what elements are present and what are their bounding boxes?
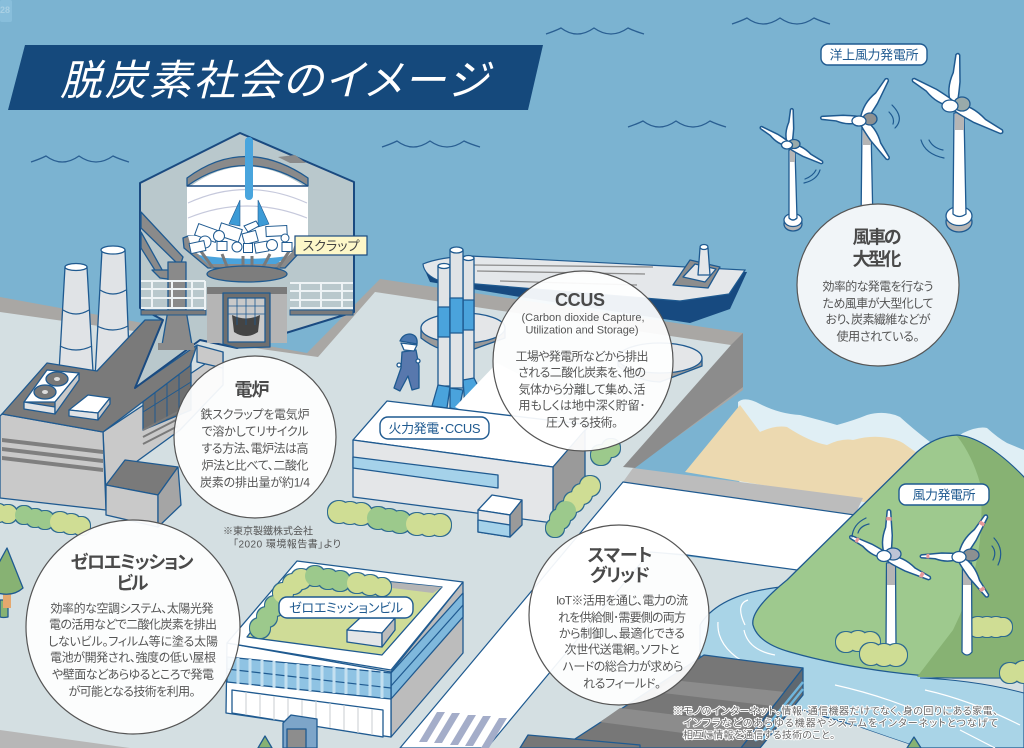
label: onshore wind bbox=[899, 484, 989, 505]
footnote: Tokyo Steel source: 「2020 環境報告書」より bbox=[233, 538, 341, 550]
footnote: IoT definition: インフラなどのあらゆる機器やシステムをインターネットとつなげて bbox=[683, 716, 998, 730]
dark solar buildings bbox=[520, 655, 803, 748]
page number bbox=[0, 0, 12, 22]
scrap pile bbox=[189, 221, 292, 254]
land bbox=[0, 292, 731, 748]
road strip bbox=[623, 468, 863, 515]
arcs bbox=[229, 200, 269, 227]
callout: electric furnace: 鉄スクラップを電気炉 bbox=[200, 406, 310, 422]
label: offshore wind bbox=[821, 44, 927, 65]
callout: CCUS: Utilization and Storage) bbox=[526, 324, 638, 336]
right railing bbox=[290, 283, 353, 315]
callout: smart grid: ハードの総合力が求めら bbox=[562, 658, 684, 674]
callout: electric furnace: 炉法と比べて、二酸化 bbox=[202, 458, 308, 472]
roof hedge bbox=[250, 566, 391, 638]
label: zero emission building: ゼロエミッションビル bbox=[289, 600, 403, 616]
label: scrap: スクラップ bbox=[302, 238, 360, 254]
furnace dome bbox=[187, 155, 308, 242]
callout: electric furnace: 炭素の排出量が約1/4 bbox=[200, 474, 310, 490]
label: onshore wind: 風力発電所 bbox=[912, 488, 976, 502]
callout: electric furnace: 電炉 bbox=[234, 380, 270, 400]
beach bbox=[685, 405, 917, 503]
label: thermal CCUS bbox=[380, 417, 489, 439]
callout: larger wind turbines: おり、炭素繊維などが bbox=[826, 312, 931, 326]
callout: CCUS: CCUS bbox=[555, 290, 605, 310]
callout: smart grid bbox=[529, 525, 709, 705]
label: thermal CCUS: 火力発電･CCUS bbox=[388, 421, 481, 436]
crane bbox=[141, 212, 194, 350]
label: zero emission building bbox=[279, 597, 413, 618]
furnace bowl bbox=[183, 236, 300, 282]
footnote: IoT definition bbox=[673, 704, 998, 742]
label: offshore wind: 洋上風力発電所 bbox=[830, 48, 918, 62]
sea waves bbox=[31, 18, 830, 162]
icon: offshore wind turbine medium bbox=[820, 76, 899, 225]
callout: smart grid: れるフィールド。 bbox=[583, 676, 661, 690]
callout: larger wind turbines: 使用されている。 bbox=[836, 328, 920, 344]
icon: offshore wind turbine small bbox=[758, 108, 825, 231]
title banner bbox=[8, 45, 543, 110]
callout: CCUS: (Carbon dioxide Capture, bbox=[522, 312, 644, 324]
white road bbox=[400, 482, 855, 748]
callout: smart grid: れを供給側･需要側の両方 bbox=[558, 610, 686, 624]
icon: offshore wind turbine large bbox=[910, 53, 1006, 232]
rooftop fan unit bbox=[24, 370, 79, 414]
turbine foot bushes bbox=[860, 643, 907, 666]
callout: zero emission building: 電の活用などで二酸化炭素を排出 bbox=[49, 618, 217, 632]
storage tanks bbox=[421, 313, 702, 382]
callout: zero emission building: ゼロエミッション bbox=[70, 552, 194, 572]
callout: CCUS: 工場や発電所などから排出 bbox=[516, 350, 648, 364]
hill bbox=[753, 435, 1024, 678]
callout: CCUS: 気体から分離して集め、活 bbox=[518, 382, 646, 396]
callout: CCUS: 用もしくは地中深く貯留･ bbox=[518, 398, 646, 412]
hill bushes bbox=[836, 617, 1024, 683]
hopper box bbox=[106, 460, 181, 527]
callout: zero emission building bbox=[26, 520, 240, 734]
title banner: 脱炭素社会のイメージ bbox=[60, 57, 494, 104]
callout: smart grid: スマート bbox=[588, 546, 652, 566]
callout: CCUS bbox=[493, 271, 673, 451]
callout: zero emission building: 効率的な空調システム、太陽光発 bbox=[50, 600, 214, 616]
chimneys bbox=[59, 246, 130, 378]
callout: smart grid: 次世代送電網。ソフトと bbox=[564, 642, 680, 656]
callout: larger wind turbines bbox=[797, 204, 959, 366]
callout: zero emission building: 電池が開発され、強度の低い屋根 bbox=[50, 650, 216, 664]
lower-left road bbox=[0, 730, 130, 748]
callout: zero emission building: しないビル。フィルム等に塗る太陽 bbox=[48, 634, 218, 648]
icon: onshore wind turbine right bbox=[920, 512, 1001, 655]
callout: larger wind turbines: 大型化 bbox=[852, 250, 902, 270]
roof box bbox=[347, 618, 395, 647]
crosswalk bbox=[419, 712, 507, 748]
callout: smart grid: IoT※活用を通じ、電力の流 bbox=[556, 594, 688, 608]
icon: trees bbox=[0, 548, 921, 748]
callout: zero emission building: が可能となる技術を利用。 bbox=[68, 684, 196, 698]
thermal power building bbox=[353, 363, 590, 537]
furnace cutaway hexagon bbox=[135, 133, 367, 388]
quay side wall bbox=[623, 333, 743, 468]
river bbox=[700, 586, 1024, 748]
left railing bbox=[141, 281, 206, 315]
worker figure bbox=[394, 334, 420, 391]
label: scrap bbox=[295, 236, 367, 255]
callout: smart grid: から制御し、最適化できる bbox=[559, 626, 685, 640]
page number: 28 bbox=[0, 5, 10, 15]
land right of road bbox=[400, 552, 1024, 748]
callout: electric furnace bbox=[174, 356, 336, 518]
entrance bbox=[283, 715, 317, 748]
callout: CCUS: 圧入する技術。 bbox=[546, 414, 618, 430]
footnote: Tokyo Steel source bbox=[223, 524, 341, 550]
callout: electric furnace: で溶かしてリサイクル bbox=[201, 424, 309, 438]
quay edge bbox=[0, 279, 743, 470]
zero emission building bbox=[226, 561, 463, 748]
rooftop box bbox=[69, 395, 110, 420]
footnote: Tokyo Steel source: ※東京製鐵株式会社 bbox=[223, 524, 313, 538]
hedge rows bbox=[0, 439, 620, 537]
callout: electric furnace: する方法、電炉法は高 bbox=[202, 440, 308, 456]
callout: larger wind turbines: ため風車が大型化して bbox=[822, 296, 934, 310]
electric furnace factory bbox=[0, 320, 223, 527]
icon: onshore wind turbine left bbox=[848, 509, 933, 666]
callout: zero emission building: や壁面などあらゆるところで発電 bbox=[52, 668, 214, 682]
CCUS stacks bbox=[432, 247, 480, 410]
callout: smart grid: グリッド bbox=[590, 564, 650, 586]
shoreline foam bbox=[738, 399, 1024, 560]
callout: zero emission building: ビル bbox=[116, 572, 149, 594]
cargo ship bbox=[423, 244, 747, 323]
furnace base bbox=[207, 287, 287, 348]
callout: larger wind turbines: 効率的な発電を行なう bbox=[822, 278, 934, 294]
callout: CCUS: される二酸化炭素を、他の bbox=[518, 366, 646, 380]
footnote: IoT definition: ※モノのインターネット。情報･通信機器だけでなく、身の回りにある家電、 bbox=[673, 704, 998, 718]
electrode bbox=[245, 137, 253, 200]
footnote: IoT definition: 相互に情報を通信する技術のこと。 bbox=[683, 728, 835, 742]
callout: larger wind turbines: 風車の bbox=[852, 228, 902, 248]
